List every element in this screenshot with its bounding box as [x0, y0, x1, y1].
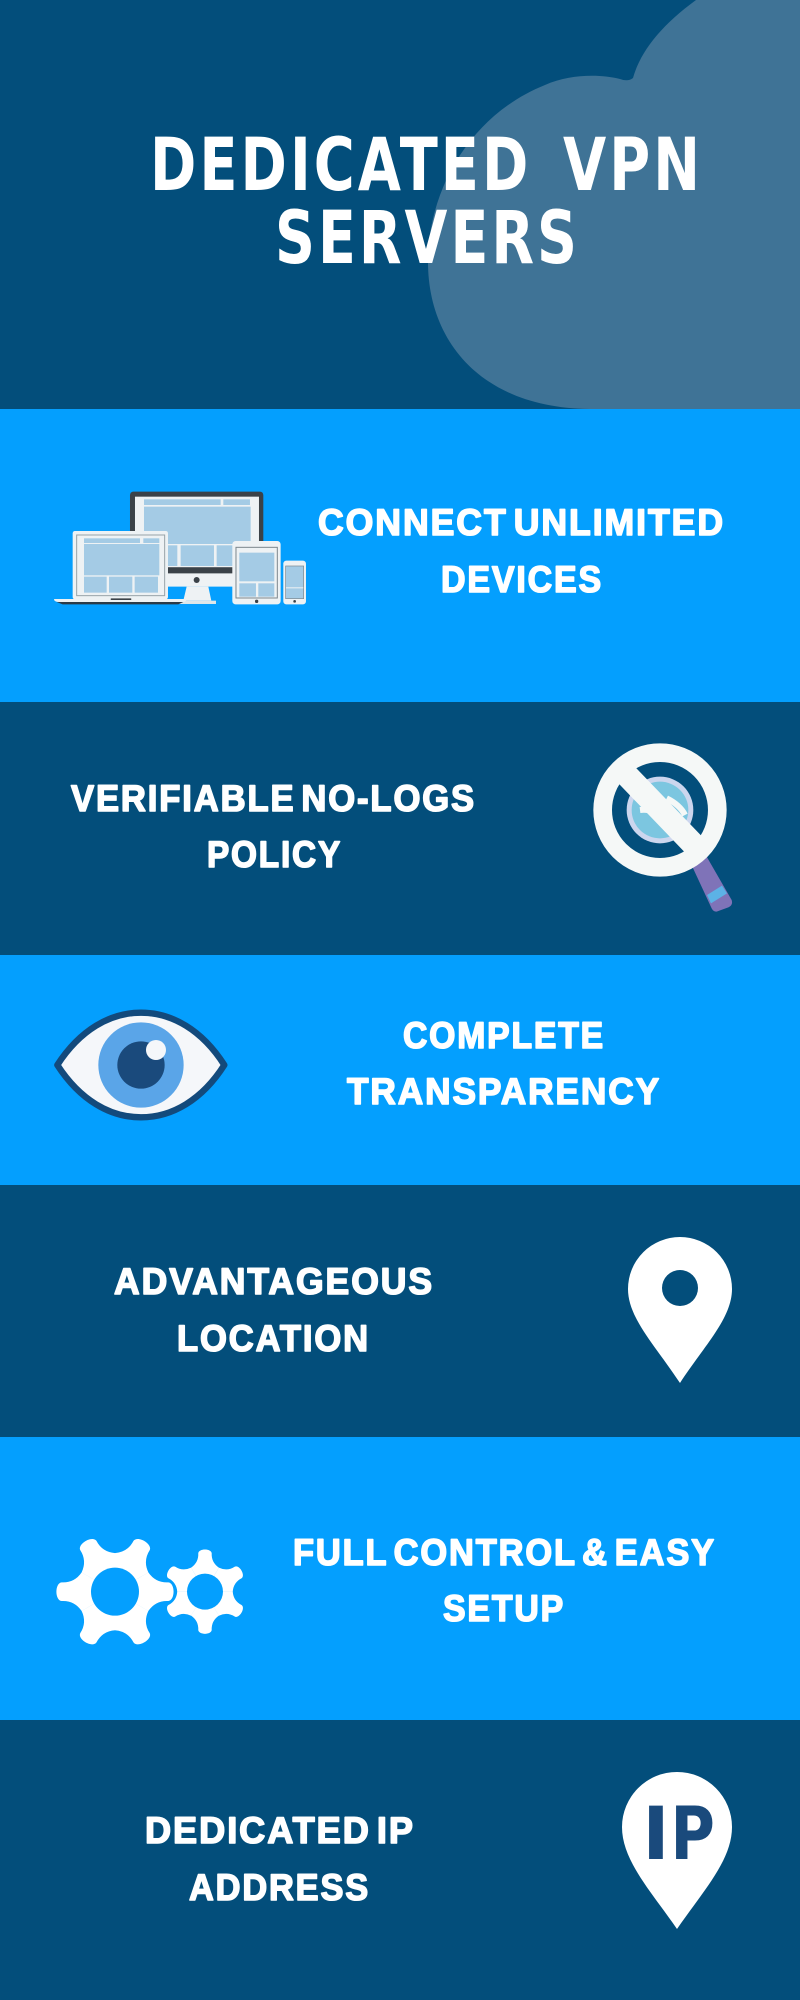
heading: dedicated ip address: DEDICATED IP	[145, 1810, 415, 1851]
heading: advantageous location: ADVANTAGEOUS	[114, 1261, 434, 1302]
heading: full control and easy setup	[293, 1532, 716, 1629]
heading: dedicated ip address: ADDRESS	[189, 1867, 370, 1908]
panel: complete transparency	[0, 955, 800, 1185]
icon: ip pin: I	[642, 1792, 670, 1877]
heading: complete transparency	[347, 1015, 661, 1112]
heading: dedicated ip address	[145, 1810, 415, 1908]
heading: connect unlimited devices	[318, 502, 725, 600]
panel: dedicated ip address	[0, 1720, 800, 2000]
icon: location pin	[628, 1237, 732, 1383]
panel: advantageous location	[0, 1185, 800, 1437]
icon: eye	[57, 1013, 224, 1117]
heading: complete transparency: TRANSPARENCY	[347, 1071, 661, 1112]
heading: full control and easy setup: FULL CONTROL & EASY	[293, 1532, 716, 1573]
icon: gears	[56, 1531, 248, 1652]
icon: devices	[54, 492, 306, 604]
panel: connect unlimited devices	[0, 409, 800, 702]
icon: crossed-out magnifying glass	[603, 753, 732, 912]
cloud shape	[428, 0, 800, 409]
heading: connect unlimited devices: DEVICES	[441, 559, 603, 600]
heading: complete transparency: COMPLETE	[403, 1015, 605, 1056]
heading: advantageous location: LOCATION	[177, 1318, 370, 1359]
heading: verifiable no-logs policy	[71, 778, 476, 875]
big gear	[56, 1531, 174, 1652]
small gear	[161, 1549, 248, 1634]
heading: verifiable no-logs policy: VERIFIABLE NO-LOGS	[71, 778, 476, 819]
panel: full control and easy setup	[0, 1437, 800, 1720]
heading: full control and easy setup: SETUP	[443, 1588, 565, 1629]
title: SERVERS	[275, 196, 580, 281]
heading: connect unlimited devices: CONNECT UNLIMITED	[318, 502, 725, 543]
panel: verifiable no-logs policy	[0, 702, 800, 955]
heading: advantageous location	[114, 1261, 434, 1359]
icon: ip pin: P	[670, 1792, 715, 1877]
icon: ip pin	[622, 1772, 732, 1929]
heading: verifiable no-logs policy: POLICY	[207, 834, 342, 875]
title	[150, 123, 703, 281]
panel: header	[0, 0, 800, 409]
